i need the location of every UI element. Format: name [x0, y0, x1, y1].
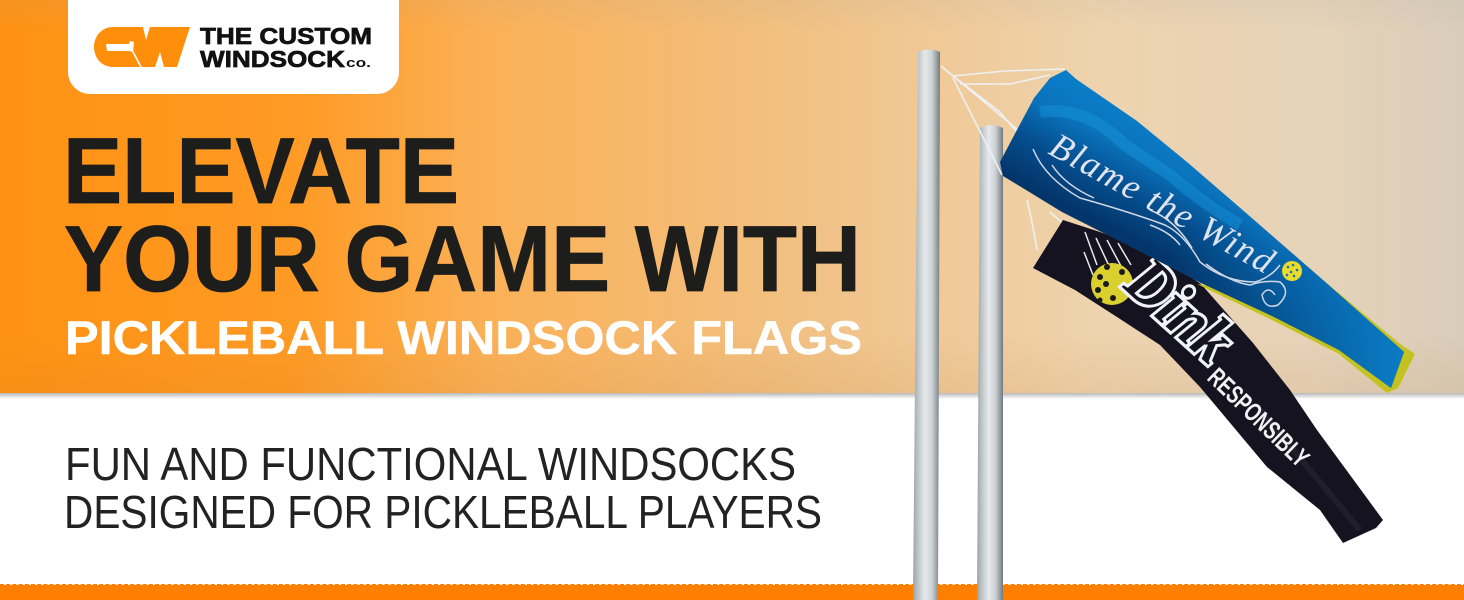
icon: pickleball — [1091, 263, 1133, 305]
windsock: blue Blame the Wind — [1000, 70, 1415, 393]
icon: small pickleball — [1282, 261, 1302, 281]
wave swirl lines — [1033, 149, 1286, 306]
logo panel — [68, 0, 399, 94]
windsock attachment cords — [941, 66, 1066, 250]
logo wordmark: WINDSOCK — [200, 46, 345, 72]
subtitle: DESIGNED FOR PICKLEBALL PLAYERS — [64, 486, 822, 538]
Dink script text: Dink — [1111, 243, 1249, 377]
pole: rear right — [977, 125, 1003, 600]
pole: front left — [913, 50, 940, 600]
title: PICKLEBALL WINDSOCK FLAGS — [65, 311, 862, 364]
orange gradient banner — [0, 0, 1464, 399]
RESPONSIBLY text: RESPONSIBLY — [1202, 362, 1315, 473]
logo wordmark: THE CUSTOM — [200, 23, 372, 49]
logo wordmark: co. — [346, 55, 371, 70]
subtitle — [64, 438, 822, 538]
icon: CW windsock logo mark — [94, 27, 190, 67]
logo wordmark — [200, 23, 372, 72]
speed lines — [1084, 232, 1131, 275]
title — [63, 118, 862, 364]
bottom orange strip — [0, 585, 1464, 600]
Blame the Wind script text: Blame the Wind — [1043, 125, 1282, 282]
windsock: black Dink Responsibly — [1033, 220, 1383, 543]
title: ELEVATE — [63, 118, 459, 223]
subtitle: FUN AND FUNCTIONAL WINDSOCKS — [65, 438, 796, 490]
title: YOUR GAME WITH — [64, 206, 861, 311]
